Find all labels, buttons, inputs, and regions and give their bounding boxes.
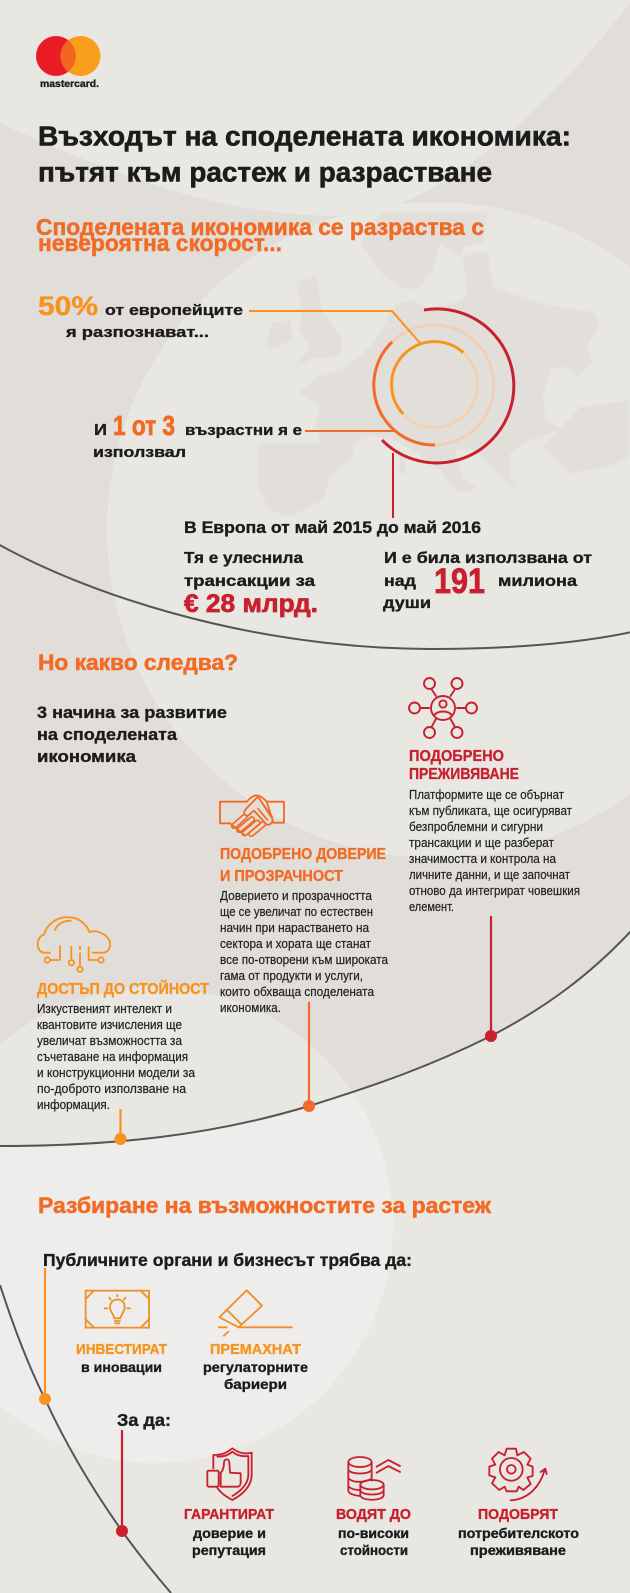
outcome: improve: потребителското — [458, 1526, 579, 1541]
block: better experience: значимостта и контрола на — [409, 852, 556, 866]
action: invest: в иновации — [81, 1360, 162, 1375]
curve line: bottom — [0, 1285, 171, 1593]
connector: red lower — [116, 1430, 128, 1537]
block: better trust: начин при нарастването на — [220, 921, 369, 935]
block: better trust: все по-отворени към широката — [220, 953, 388, 967]
ring chart — [374, 309, 514, 463]
map of Europe — [257, 213, 630, 517]
block: better experience — [409, 748, 580, 914]
stat: 50%: от европейците — [105, 302, 243, 319]
stat: 191 million: над — [384, 573, 416, 590]
stat: 50%: 50% — [38, 291, 98, 321]
connector: yellow — [114, 1109, 126, 1145]
intro: 3 ways — [37, 703, 227, 766]
outcome: guarantee: доверие и — [193, 1526, 266, 1541]
action: remove — [203, 1341, 309, 1392]
block: better experience: безпроблемни и сигурни — [409, 820, 543, 834]
mastercard logo: mastercard. — [40, 78, 99, 90]
icon: bulb banknote — [86, 1291, 149, 1328]
stat: 50%: я разпознават... — [66, 324, 209, 341]
block: better trust: които обхваща споделената — [220, 985, 374, 999]
leader line: Europe — [392, 453, 394, 518]
block: better experience: личните данни, и ще започнат — [409, 868, 570, 882]
leader line: 50% — [249, 311, 420, 343]
stat: 191 million: души — [383, 595, 431, 612]
stat: 28 billion — [184, 550, 318, 618]
title: пътят към растеж и разрастване — [38, 156, 492, 188]
connector: red — [485, 916, 497, 1042]
action: remove: бариери — [224, 1377, 287, 1392]
stat: 191 million: 191 — [434, 562, 485, 601]
block: access to value: информация. — [37, 1098, 110, 1112]
heading: growth opportunities: Разбиране на възможностите за растеж — [38, 1193, 491, 1218]
block: better experience: отново да интегрират човешкия — [409, 884, 580, 898]
heading: growth speed — [36, 214, 484, 256]
action: invest — [76, 1341, 167, 1375]
block: access to value: увеличат възможността за — [37, 1034, 182, 1048]
leader line: 1 of 3 — [305, 430, 396, 432]
icon: eraser — [219, 1290, 292, 1336]
outcome: lead to: по-високи — [338, 1526, 409, 1541]
block: better trust: И ПРОЗРАЧНОСТ — [220, 868, 343, 885]
stat: 28 billion: € 28 млрд. — [184, 590, 318, 618]
block: better trust: гама от продукти и услуги, — [220, 969, 363, 983]
block: better experience: към публиката, ще осигуряват — [409, 804, 572, 818]
outcome: guarantee: репутация — [192, 1543, 266, 1558]
block: better trust: ще се увеличат по естествен — [220, 905, 373, 919]
block: better experience: ПРЕЖИВЯВАНЕ — [409, 766, 519, 783]
action: remove: регулаторните — [203, 1360, 309, 1375]
heading: growth speed: Споделената икономика се разраства с — [36, 214, 484, 240]
intro: 3 ways: на споделената — [37, 725, 178, 744]
stat: 191 million: И е била използвана от — [384, 550, 592, 567]
title — [38, 120, 571, 188]
block: better trust: Доверието и прозрачността — [220, 889, 372, 903]
outcome: lead to — [336, 1506, 411, 1558]
stat: 191 million — [383, 550, 592, 612]
Europe period heading: В Европа от май 2015 до май 2016 — [184, 519, 481, 537]
icon: shield thumbs up — [207, 1448, 252, 1500]
heading: what next: Но какво следва? — [38, 650, 238, 675]
icon: handshake — [220, 795, 284, 835]
block: better experience: Платформите ще се обърнат — [409, 788, 564, 802]
outcome: lead to: стойности — [340, 1543, 408, 1558]
stat: 191 million: милиона — [498, 573, 577, 590]
outcome: improve: преживяване — [470, 1543, 567, 1558]
stat: 28 billion: Тя е улеснила — [184, 550, 303, 567]
stat: 1 of 3: И — [94, 422, 107, 439]
stat: 1 of 3: 1 от 3 — [113, 410, 175, 441]
icon: cloud circuit — [38, 917, 110, 972]
block: better trust: ПОДОБРЕНО ДОВЕРИЕ — [220, 846, 386, 863]
stat: 1 of 3 — [93, 410, 302, 461]
icon: network — [409, 678, 477, 738]
block: access to value — [37, 979, 209, 1112]
action: invest: ИНВЕСТИРАТ — [76, 1341, 167, 1358]
block: better trust: икономика. — [220, 1001, 281, 1015]
subheading: in order to: За да: — [117, 1410, 171, 1430]
block: access to value: квантовите изчисления ще — [37, 1018, 182, 1032]
connector: yellow lower — [39, 1268, 51, 1405]
stat: 1 of 3: използвал — [93, 444, 186, 461]
icon: coins — [348, 1457, 400, 1500]
heading: growth speed: невероятна скорост... — [38, 230, 282, 256]
stat: 1 of 3: възрастни я е — [185, 422, 302, 439]
connector: orange — [303, 1002, 315, 1112]
outcome: improve: ПОДОБРЯТ — [478, 1506, 558, 1523]
block: better experience: трансакции и ще разберат — [409, 836, 554, 850]
mastercard logo — [36, 36, 100, 90]
block: better experience: елемент. — [409, 900, 454, 914]
curve line: middle — [0, 930, 630, 1146]
outcome: guarantee: ГАРАНТИРАТ — [184, 1506, 274, 1523]
subheading: authorities and business: Публичните органи и бизнесът трябва да: — [43, 1250, 412, 1270]
icon: gear arrow — [489, 1449, 547, 1500]
curve line: top — [0, 544, 630, 649]
block: access to value: Изкуственият интелект и — [37, 1002, 172, 1016]
block: access to value: ДОСТЪП ДО СТОЙНОСТ — [37, 979, 209, 998]
outcome: guarantee — [184, 1506, 274, 1558]
block: better trust — [220, 846, 388, 1015]
intro: 3 ways: 3 начина за развитие — [37, 703, 227, 722]
block: access to value: съчетаване на информация — [37, 1050, 188, 1064]
block: better experience: ПОДОБРЕНО — [409, 748, 504, 765]
block: better trust: сектора и хората ще станат — [220, 937, 371, 951]
stat: 50% — [38, 291, 243, 341]
outcome: lead to: ВОДЯТ ДО — [336, 1506, 411, 1523]
title: Възходът на споделената икономика: — [38, 120, 571, 152]
stat: 28 billion: трансакции за — [184, 573, 315, 590]
action: remove: ПРЕМАХНАТ — [210, 1341, 301, 1358]
block: access to value: по-доброто използване на — [37, 1082, 186, 1096]
outcome: improve — [458, 1506, 579, 1558]
intro: 3 ways: икономика — [37, 747, 137, 766]
block: access to value: и конструкционни модели за — [37, 1066, 195, 1080]
